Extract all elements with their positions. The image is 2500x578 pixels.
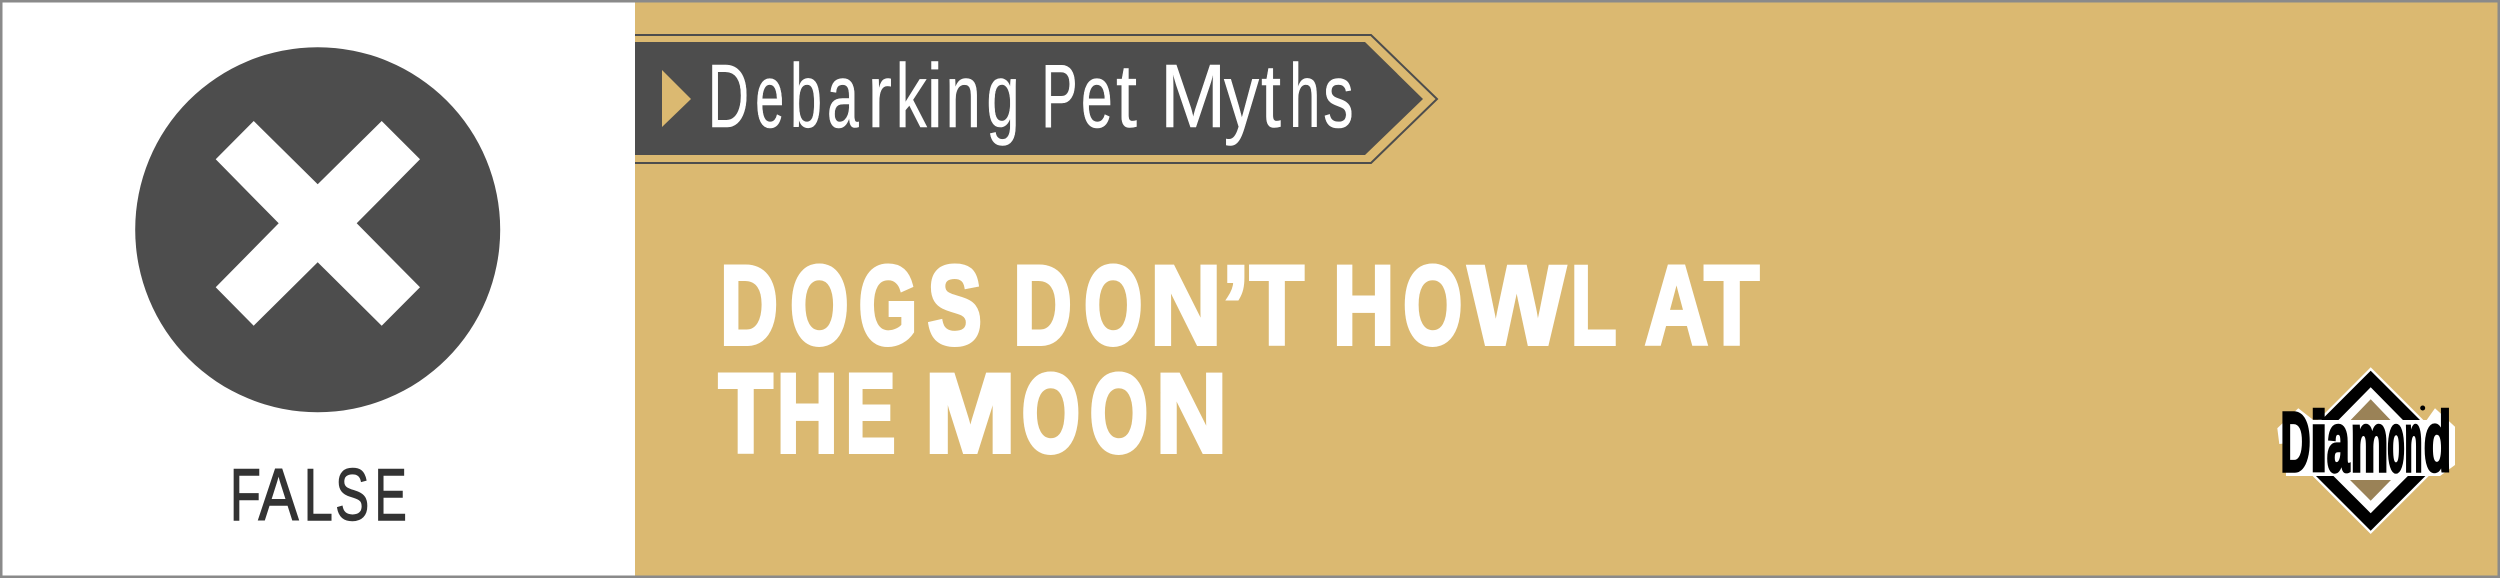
logo: Diamond: a — [2327, 395, 2350, 489]
heading: Dogs don't howl at the moon: H — [776, 351, 838, 476]
banner title: k — [896, 47, 927, 147]
verdict label: F — [230, 455, 261, 536]
heading: Dogs don't howl at the moon: H — [1333, 243, 1394, 368]
banner title: t — [1261, 47, 1281, 147]
banner title: b — [790, 47, 822, 147]
logo: Diamond: D — [2280, 395, 2311, 489]
heading: Dogs don't howl at the moon: S — [927, 243, 982, 368]
heading: Dogs don't howl at the moon: A — [1645, 243, 1708, 368]
heading: Dogs don't howl at the moon: O — [1022, 351, 1080, 476]
banner title: y — [1224, 47, 1259, 147]
panel: myth — [635, 2, 2498, 576]
heading: Dogs don't howl at the moon: N — [1156, 351, 1227, 476]
banner title: h — [1289, 47, 1320, 147]
banner title: s — [1323, 47, 1354, 147]
logo: Diamond: i — [2310, 395, 2328, 489]
heading: Dogs don't howl at the moon: W — [1468, 243, 1566, 368]
logo: Diamond: n — [2405, 395, 2422, 489]
banner title: a — [827, 47, 859, 147]
heading: Dogs don't howl at the moon: D — [1013, 243, 1072, 368]
banner title: i — [927, 47, 943, 147]
banner title: P — [1041, 47, 1078, 147]
banner title: n — [946, 47, 981, 147]
heading: Dogs don't howl at the moon: G — [858, 243, 917, 368]
banner title: e — [1081, 47, 1113, 147]
heading: Dogs don't howl at the moon: T — [1250, 243, 1304, 368]
verdict label: L — [304, 455, 333, 536]
heading: Dogs don't howl at the moon: O — [1090, 351, 1148, 476]
banner title: t — [1116, 47, 1137, 147]
heading: Dogs don't howl at the moon: N — [1150, 243, 1222, 368]
verdict label: S — [335, 455, 369, 536]
heading: Dogs don't howl at the moon: ’ — [1222, 243, 1249, 368]
banner title: e — [755, 47, 784, 147]
verdict label: E — [375, 455, 407, 536]
banner title: g — [986, 47, 1020, 147]
heading: Dogs don't howl at the moon: O — [1084, 243, 1143, 368]
banner title: r — [868, 47, 892, 147]
heading: Dogs don't howl at the moon: M — [924, 351, 1016, 476]
logo: Diamond: o — [2387, 395, 2405, 489]
heading: Dogs don't howl at the moon: D — [720, 243, 778, 368]
logo: Diamond: m — [2351, 395, 2388, 489]
banner title: D — [708, 47, 749, 147]
heading: Dogs don't howl at the moon: L — [1571, 243, 1615, 368]
heading: Dogs don't howl at the moon: E — [845, 351, 896, 476]
heading: Dogs don't howl at the moon: O — [1403, 243, 1462, 368]
heading: Dogs don't howl at the moon: O — [790, 243, 849, 368]
logo: Diamond — [2277, 367, 2455, 534]
panel: verdict — [2, 2, 635, 576]
verdict label: A — [258, 455, 299, 536]
icon: banner arrow — [662, 70, 691, 127]
icon: false cross in circle — [135, 47, 500, 412]
heading: Dogs don't howl at the moon: T — [1704, 243, 1759, 368]
heading: Dogs don't howl at the moon — [718, 243, 1759, 476]
banner: Debarking Pet Myths — [635, 35, 1437, 163]
banner title: M — [1160, 47, 1226, 147]
logo: Diamond: d — [2424, 395, 2451, 489]
heading: Dogs don't howl at the moon: T — [718, 351, 773, 476]
